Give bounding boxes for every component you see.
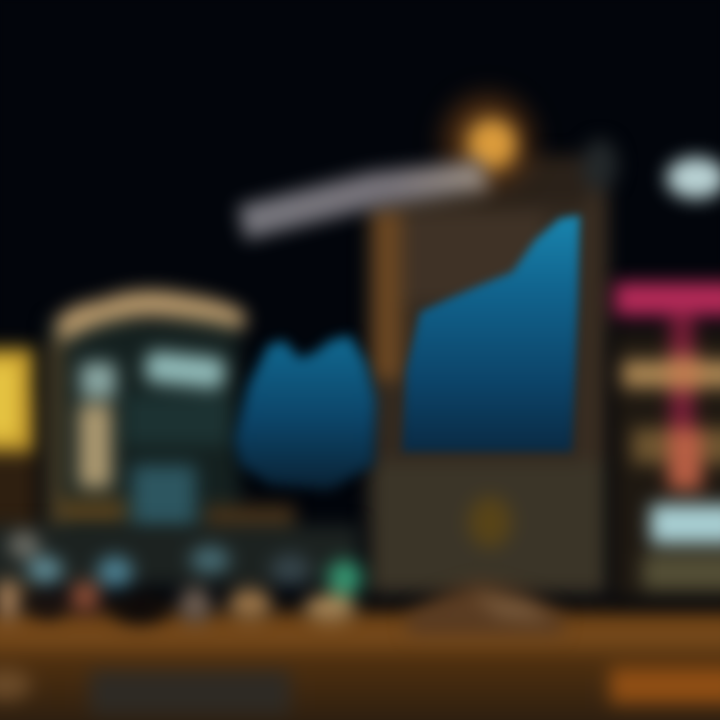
pink sign [614, 282, 720, 316]
ground glow [0, 612, 720, 720]
left yellow building [0, 348, 38, 600]
area chart: left blue [234, 335, 376, 490]
moon [426, 78, 550, 202]
left building [46, 290, 295, 560]
white oval light [666, 157, 720, 199]
center building [368, 139, 618, 595]
roof band [55, 290, 246, 344]
left column [46, 340, 64, 540]
right building signs [612, 282, 720, 600]
tan stripes [622, 360, 720, 388]
car in foreground [405, 582, 565, 635]
windows [80, 362, 116, 398]
light streak [238, 160, 490, 240]
pale sign [650, 504, 720, 544]
street lights [0, 525, 363, 624]
area chart: right blue [402, 215, 580, 452]
